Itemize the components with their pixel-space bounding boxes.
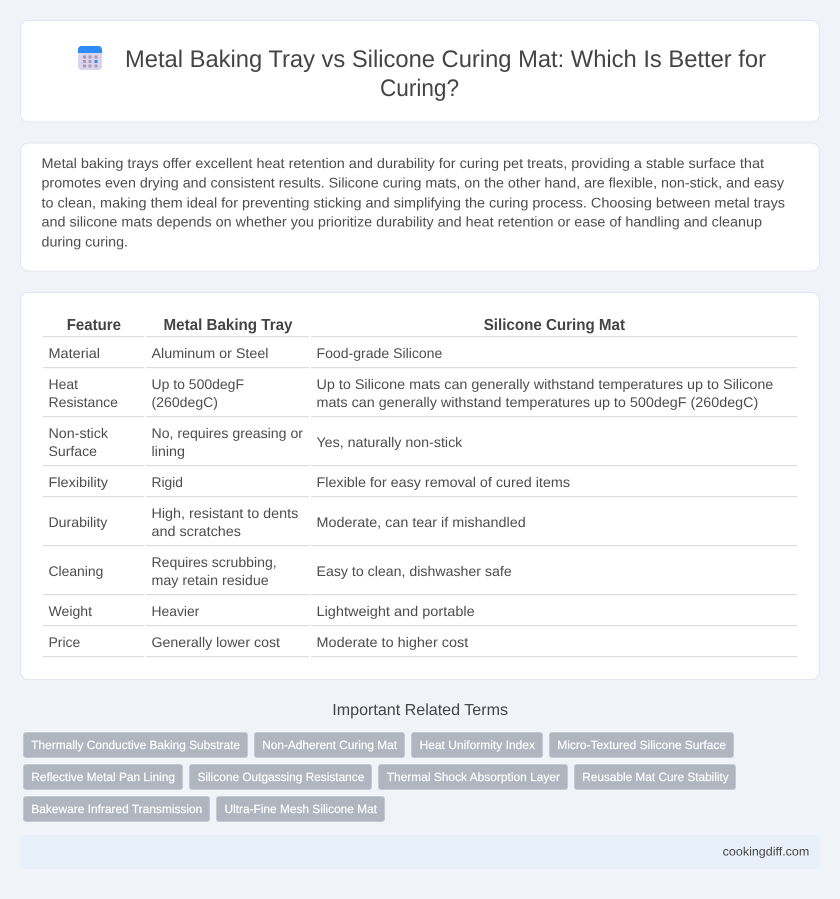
row: non-stick surface: Yes, naturally non-stick bbox=[316, 434, 463, 450]
table header row: Silicone Curing Mat bbox=[484, 317, 626, 334]
row: durability: High, resistant to dents bbox=[152, 505, 298, 521]
row: cleaning: may retain residue bbox=[152, 572, 269, 588]
row: heat resistance: Resistance bbox=[48, 394, 118, 410]
tag: Ultra-Fine Mesh Silicone Mat bbox=[224, 802, 378, 816]
row: price bbox=[48, 634, 468, 650]
row: non-stick surface: Non-stick bbox=[48, 425, 109, 441]
row: weight: Lightweight and portable bbox=[316, 603, 475, 619]
tag bbox=[574, 764, 736, 790]
intro paragraph: during curing. bbox=[42, 234, 128, 250]
tag bbox=[24, 796, 210, 822]
tag bbox=[190, 764, 372, 790]
footer: cookingdiff.com bbox=[723, 845, 809, 859]
intro paragraph: to clean, making them ideal for preventing sticking and simplifying the curing process. Choosing between metal trays bbox=[42, 194, 785, 210]
intro paragraph: and silicone mats depends on whether you prioritize durability and heat retention or ease of handling and cleanup bbox=[42, 214, 762, 230]
tag: Silicone Outgassing Resistance bbox=[198, 770, 365, 784]
tag bbox=[24, 764, 182, 790]
tag bbox=[216, 796, 384, 822]
row: cleaning bbox=[48, 554, 512, 588]
row: cleaning: Requires scrubbing, bbox=[152, 554, 277, 570]
tag: Thermally Conductive Baking Substrate bbox=[31, 738, 240, 752]
icon: calendar bbox=[78, 46, 102, 70]
row: heat resistance bbox=[48, 376, 774, 410]
row: weight: Heavier bbox=[152, 603, 200, 619]
row: non-stick surface: Surface bbox=[48, 443, 97, 459]
row: non-stick surface: lining bbox=[152, 443, 185, 459]
tag: Reflective Metal Pan Lining bbox=[31, 770, 175, 784]
row: weight bbox=[48, 603, 475, 619]
row: non-stick surface: No, requires greasing or bbox=[152, 425, 303, 441]
row: flexibility: Flexible for easy removal of cured items bbox=[316, 474, 570, 490]
title: Curing? bbox=[380, 75, 459, 102]
row: material bbox=[48, 345, 443, 361]
tag bbox=[24, 732, 248, 758]
row: durability: and scratches bbox=[152, 523, 241, 539]
row: durability: Moderate, can tear if mishandled bbox=[316, 514, 526, 530]
tag bbox=[254, 732, 404, 758]
row: price: Moderate to higher cost bbox=[316, 634, 468, 650]
tag: Reusable Mat Cure Stability bbox=[582, 770, 729, 784]
table header row: Metal Baking Tray bbox=[164, 317, 293, 334]
row: heat resistance: mats can generally withstand temperatures up to 500degF (260degC) bbox=[316, 394, 758, 410]
tag: Bakeware Infrared Transmission bbox=[31, 802, 202, 816]
table header row bbox=[67, 317, 626, 334]
row: material: Material bbox=[48, 345, 100, 361]
tag: Micro-Textured Silicone Surface bbox=[557, 738, 726, 752]
row: non-stick surface bbox=[48, 425, 463, 459]
related term tags bbox=[24, 732, 736, 822]
row: material: Aluminum or Steel bbox=[152, 345, 268, 361]
row: price: Price bbox=[48, 634, 81, 650]
row: heat resistance: Up to 500degF bbox=[152, 376, 244, 392]
heading: important related terms: Important Related Terms bbox=[332, 702, 508, 719]
intro paragraph bbox=[42, 155, 785, 250]
intro paragraph: promotes even drying and consistent results. Silicone curing mats, on the other hand, are flexible, non-stick, and easy bbox=[42, 174, 784, 190]
row: durability: Durability bbox=[48, 514, 107, 530]
panel: introduction bbox=[20, 143, 820, 271]
row: durability bbox=[48, 505, 526, 539]
tag: Non-Adherent Curing Mat bbox=[262, 738, 398, 752]
table header row: Feature bbox=[67, 317, 121, 334]
title: Metal Baking Tray vs Silicone Curing Mat: Which Is Better for bbox=[125, 46, 766, 73]
row: heat resistance: Up to Silicone mats can generally withstand temperatures up to Silicone bbox=[316, 376, 774, 392]
row: weight: Weight bbox=[48, 603, 92, 619]
panel: comparison table bbox=[20, 292, 820, 680]
row: flexibility bbox=[48, 474, 570, 490]
row: material: Food-grade Silicone bbox=[316, 345, 443, 361]
row: heat resistance: Heat bbox=[48, 376, 78, 392]
tag bbox=[378, 764, 568, 790]
tag bbox=[412, 732, 542, 758]
footer bbox=[20, 835, 820, 869]
row: flexibility: Rigid bbox=[152, 474, 183, 490]
row: price: Generally lower cost bbox=[152, 634, 280, 650]
tag: Heat Uniformity Index bbox=[420, 738, 535, 752]
row: cleaning: Easy to clean, dishwasher safe bbox=[316, 563, 512, 579]
title bbox=[125, 46, 766, 102]
row: heat resistance: (260degC) bbox=[152, 394, 218, 410]
panel: header bbox=[20, 20, 820, 122]
tag bbox=[550, 732, 734, 758]
intro paragraph: Metal baking trays offer excellent heat retention and durability for curing pet treats, providing a stable surface that bbox=[42, 155, 764, 171]
row: flexibility: Flexibility bbox=[48, 474, 108, 490]
tag: Thermal Shock Absorption Layer bbox=[387, 770, 560, 784]
row: cleaning: Cleaning bbox=[48, 563, 103, 579]
